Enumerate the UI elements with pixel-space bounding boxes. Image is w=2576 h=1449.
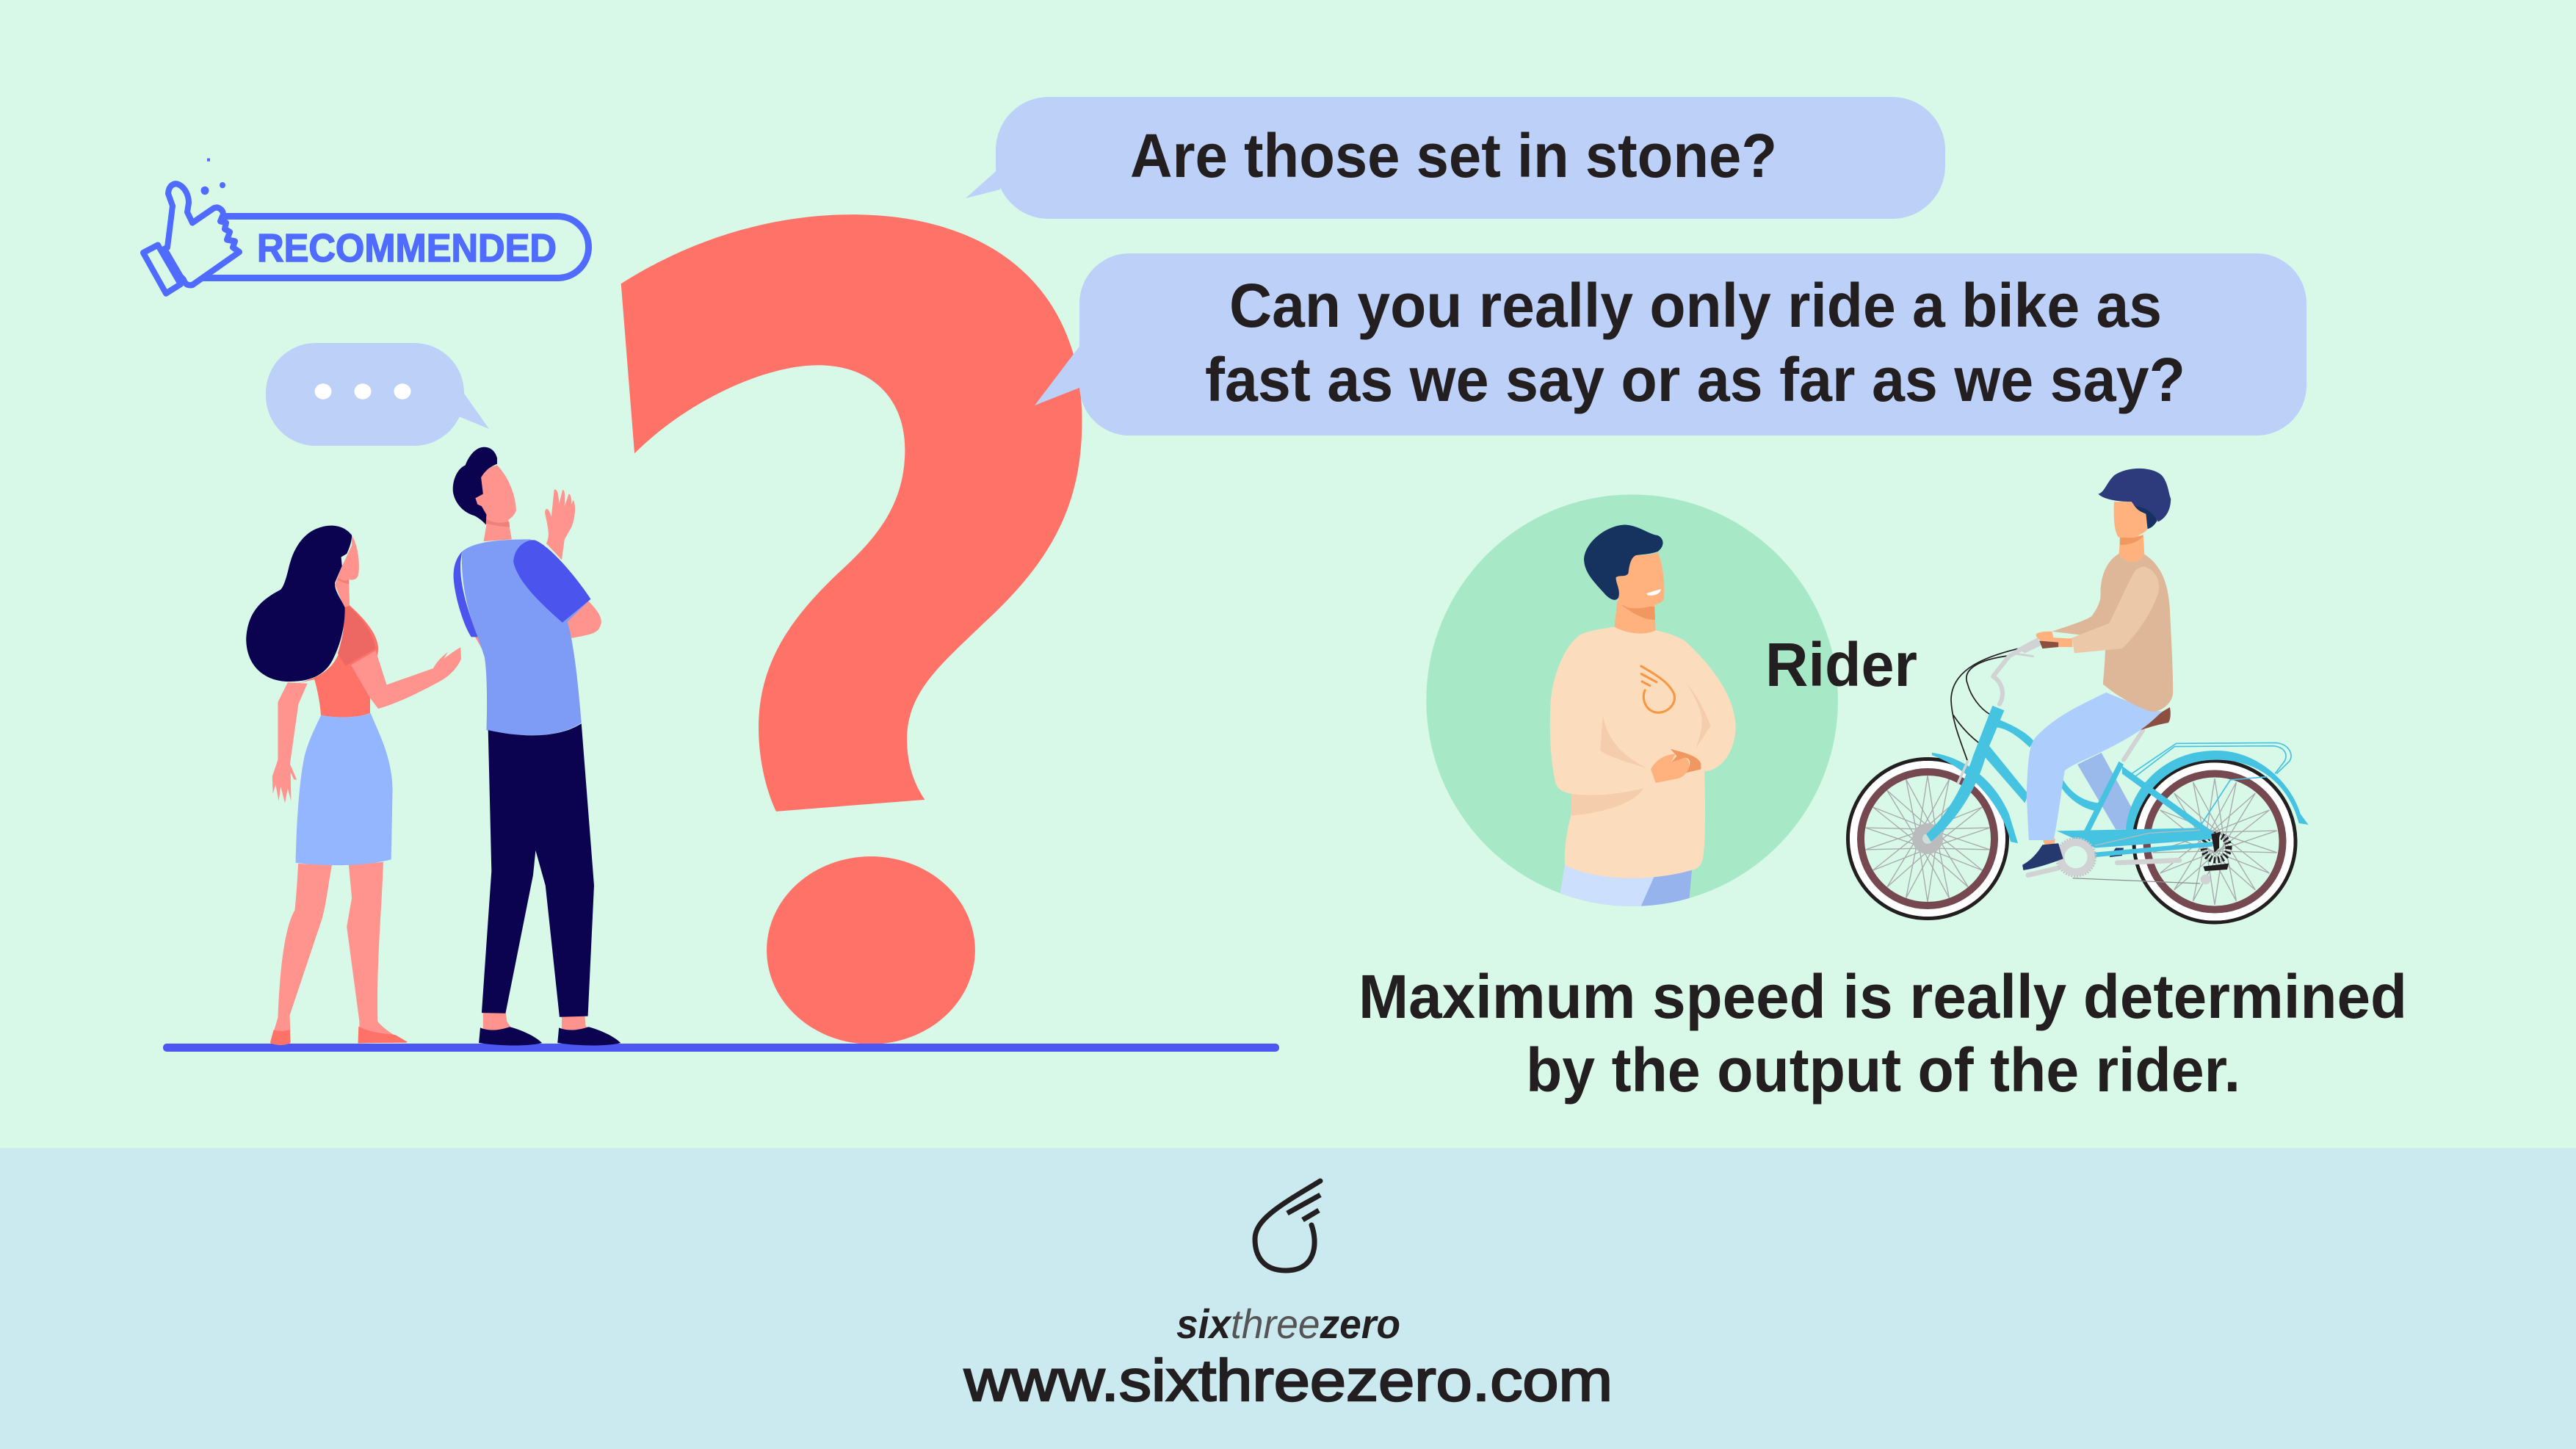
rear wheel: [2134, 761, 2295, 922]
speech bubble: dots: [266, 343, 489, 446]
ground line: [163, 1044, 1279, 1052]
front wheel: [1848, 759, 2008, 918]
big question mark: [621, 214, 1082, 1044]
caption line 2: by the output of the rider.: [1526, 1036, 2240, 1105]
rider label: Rider: [1765, 630, 1917, 699]
woman figure: [246, 526, 461, 1045]
badge text: RECOMMENDED: [257, 226, 557, 270]
bike cables: [1951, 648, 2019, 762]
speech bubble: set in stone: [966, 97, 1945, 219]
caption line 1: Maximum speed is really determined: [1358, 962, 2407, 1031]
rider portrait in circle: [1426, 494, 1838, 907]
footer band: [0, 1148, 2576, 1449]
chainring: [2056, 838, 2096, 876]
icon: shirt logo: [1641, 666, 1674, 712]
brand name: sixthreezero: [1176, 1301, 1400, 1347]
icon: thumbs up: [143, 159, 239, 294]
icon: sixthreezero logo: [1255, 1181, 1320, 1271]
website url: www.sixthreezero.com: [963, 1348, 1613, 1413]
recommended badge: [143, 159, 589, 294]
rider body: [2042, 839, 2055, 848]
rear rack: [2132, 742, 2291, 826]
frame: [1926, 706, 2309, 857]
man figure: [453, 447, 621, 1045]
bubble text: Are those set in stone?: [1130, 121, 1777, 190]
bubble text line 2: fast as we say or as far as we say?: [1205, 345, 2185, 414]
rider head and helmet: [2114, 502, 2148, 538]
chain and pedals: [2073, 878, 2200, 884]
bicycle and rider: [1848, 469, 2309, 922]
speech bubble: how fast: [1035, 253, 2307, 436]
handlebar and seat post: [1958, 643, 2143, 783]
bubble text line 1: Can you really only ride a bike as: [1229, 271, 2162, 340]
